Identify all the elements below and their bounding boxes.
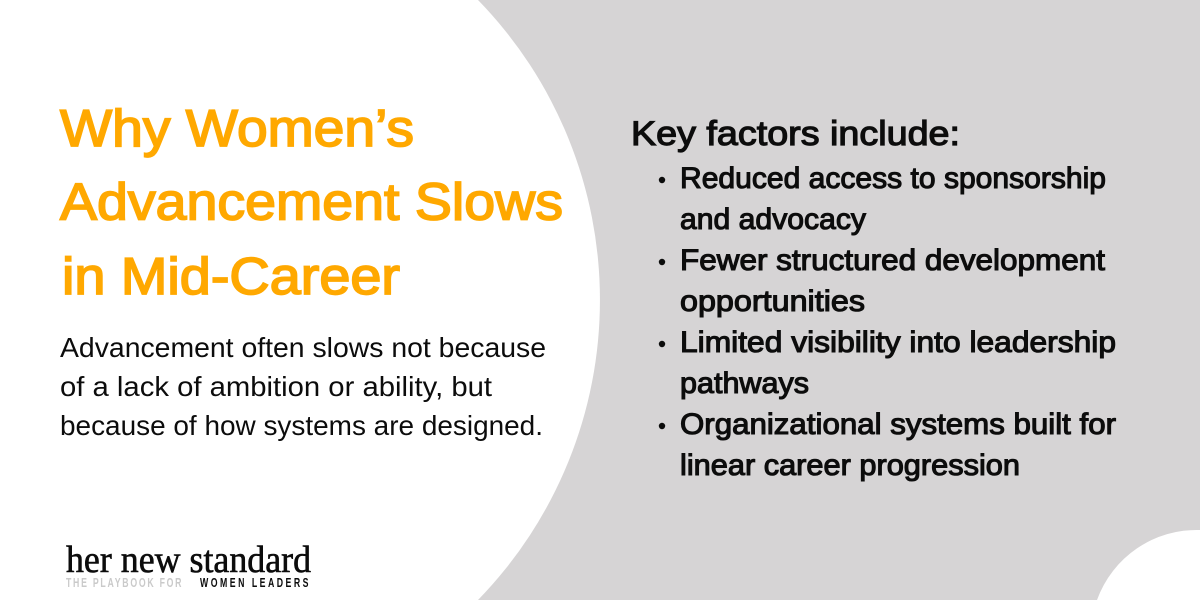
bullet: development: opportunities [680, 285, 865, 318]
bullet: sponsorship [659, 162, 1106, 236]
logo: WOMEN LEADERS [200, 577, 308, 590]
bullet: visibility [659, 326, 1116, 400]
intro text: Advancement often slows not because [60, 332, 546, 363]
bullet: visibility: Limited visibility into leadership [680, 326, 1116, 359]
corner circle [1097, 530, 1200, 600]
bullet: systems: linear career progression [680, 449, 1020, 482]
title: Why Women’s [60, 100, 414, 158]
title: in Mid-Career [62, 248, 400, 306]
intro text [60, 332, 546, 441]
bullet: systems: Organizational systems built for [680, 408, 1116, 441]
key factors heading: Key factors include: [631, 115, 960, 153]
intro text: because of how systems are designed. [60, 410, 543, 441]
bullet: systems [659, 408, 1116, 482]
bullet: visibility: pathways [680, 367, 809, 400]
title [60, 100, 563, 306]
bullet: development [659, 244, 1105, 318]
bullet: sponsorship: and advocacy [680, 203, 866, 236]
key factors list [659, 162, 1116, 482]
bullet: sponsorship: Reduced access to sponsorship [680, 162, 1106, 195]
intro text: of a lack of ambition or ability, but [60, 371, 492, 402]
logo: THE PLAYBOOK FOR [66, 577, 182, 590]
bullet: development: Fewer structured development [680, 244, 1105, 277]
white circle panel [0, 0, 600, 600]
title: Advancement Slows [60, 174, 563, 232]
logo: her new standard [66, 539, 311, 581]
